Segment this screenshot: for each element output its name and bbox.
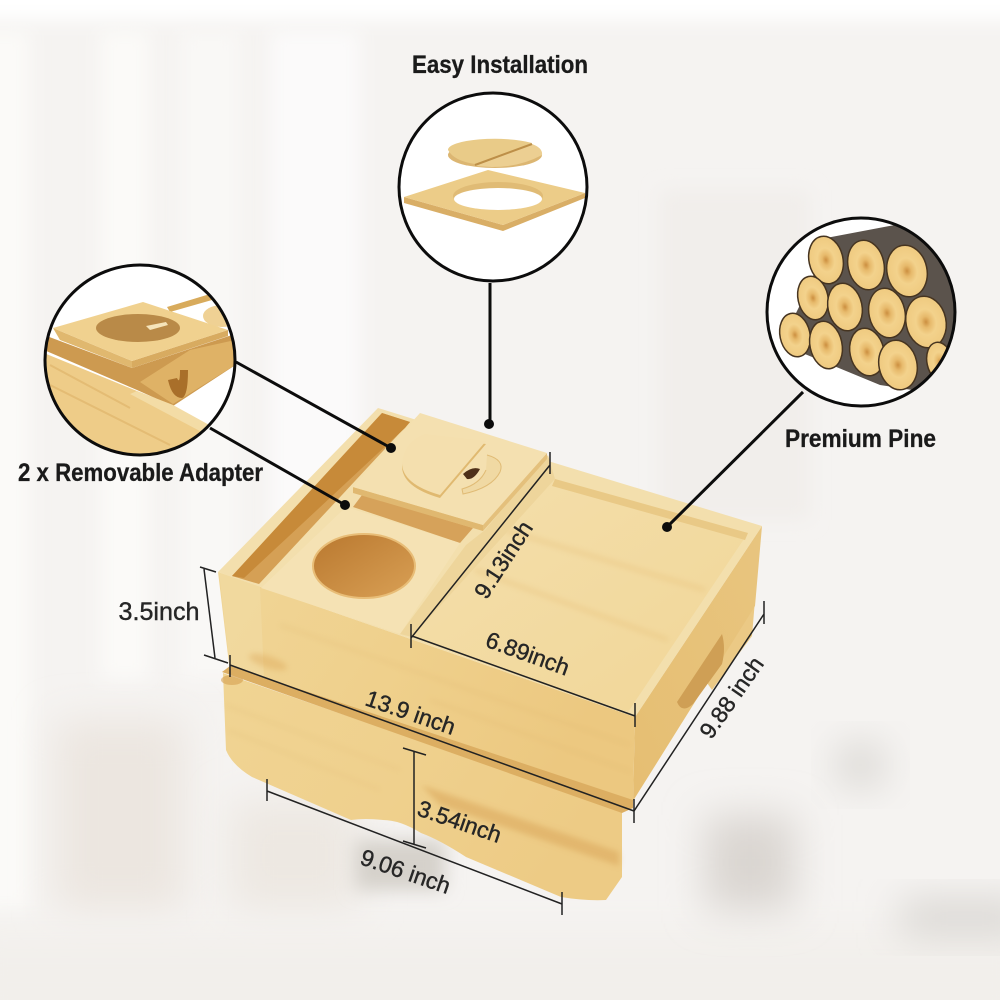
dimension: 9.06 inch width [267,779,562,915]
square plate with hole [404,170,585,231]
upper box right side [633,526,762,801]
leader line: easy installation [484,283,494,429]
notch [168,370,188,398]
dimension: 9.88 inch depth: 9.88 inch [694,652,769,743]
heading: premium pine: Premium Pine [785,425,936,453]
heading: removable adapter: 2 x Removable Adapter [18,459,263,487]
back strip and small disc [167,294,212,312]
log ends [778,236,947,390]
dimension: 13.9 inch width: 13.9 inch [362,685,459,740]
upper box front board [218,572,635,801]
dark inside area [44,335,240,406]
lower sofa-arm clamp front board [221,673,622,900]
dimension: 6.89 inch width: 6.89inch [482,626,573,681]
tray floor [412,479,748,712]
handle slot [677,634,724,709]
product: wooden tray organizer [218,408,762,900]
leader line: premium pine [662,392,803,532]
heading: easy installation: Easy Installation [412,51,588,79]
dimension: 3.54 inch height [403,748,505,848]
callout circle: premium pine logs [767,218,965,406]
callout circle: removable adapter [40,265,241,470]
callout circle: easy installation [399,93,587,281]
dimension: 6.89 inch width [412,626,635,727]
dimension: 3.5 inch height [118,567,228,663]
small dark gap [463,468,480,479]
bark [795,224,965,392]
split wooden disc [448,139,542,168]
seam between boards [222,666,633,813]
dimension: 3.54 inch height: 3.54inch [414,795,505,848]
slot behind adapter plate [353,495,473,543]
dimension: 9.13 inch depth: 9.13inch [469,516,538,603]
handle side support [705,600,755,690]
removable adapter plate with cup hole [261,507,460,634]
left open well [232,413,410,584]
dimension: 9.13 inch depth [411,452,550,648]
top rim of box [218,408,762,717]
dimension: 3.5 inch height: 3.5inch [118,598,200,626]
plate with hole [53,328,132,368]
box front board [46,354,200,454]
dimension: 9.88 inch depth [634,601,769,811]
cup hole [313,534,415,598]
leader line: upper adapter [236,362,396,453]
leader line: lower adapter [210,428,350,510]
half disc pieces [462,455,501,494]
divider rail [400,455,555,637]
second adapter plate with round insert [353,413,547,531]
dimension: 13.9 inch width [230,655,634,823]
dimension: 9.06 inch width: 9.06 inch [357,844,454,899]
